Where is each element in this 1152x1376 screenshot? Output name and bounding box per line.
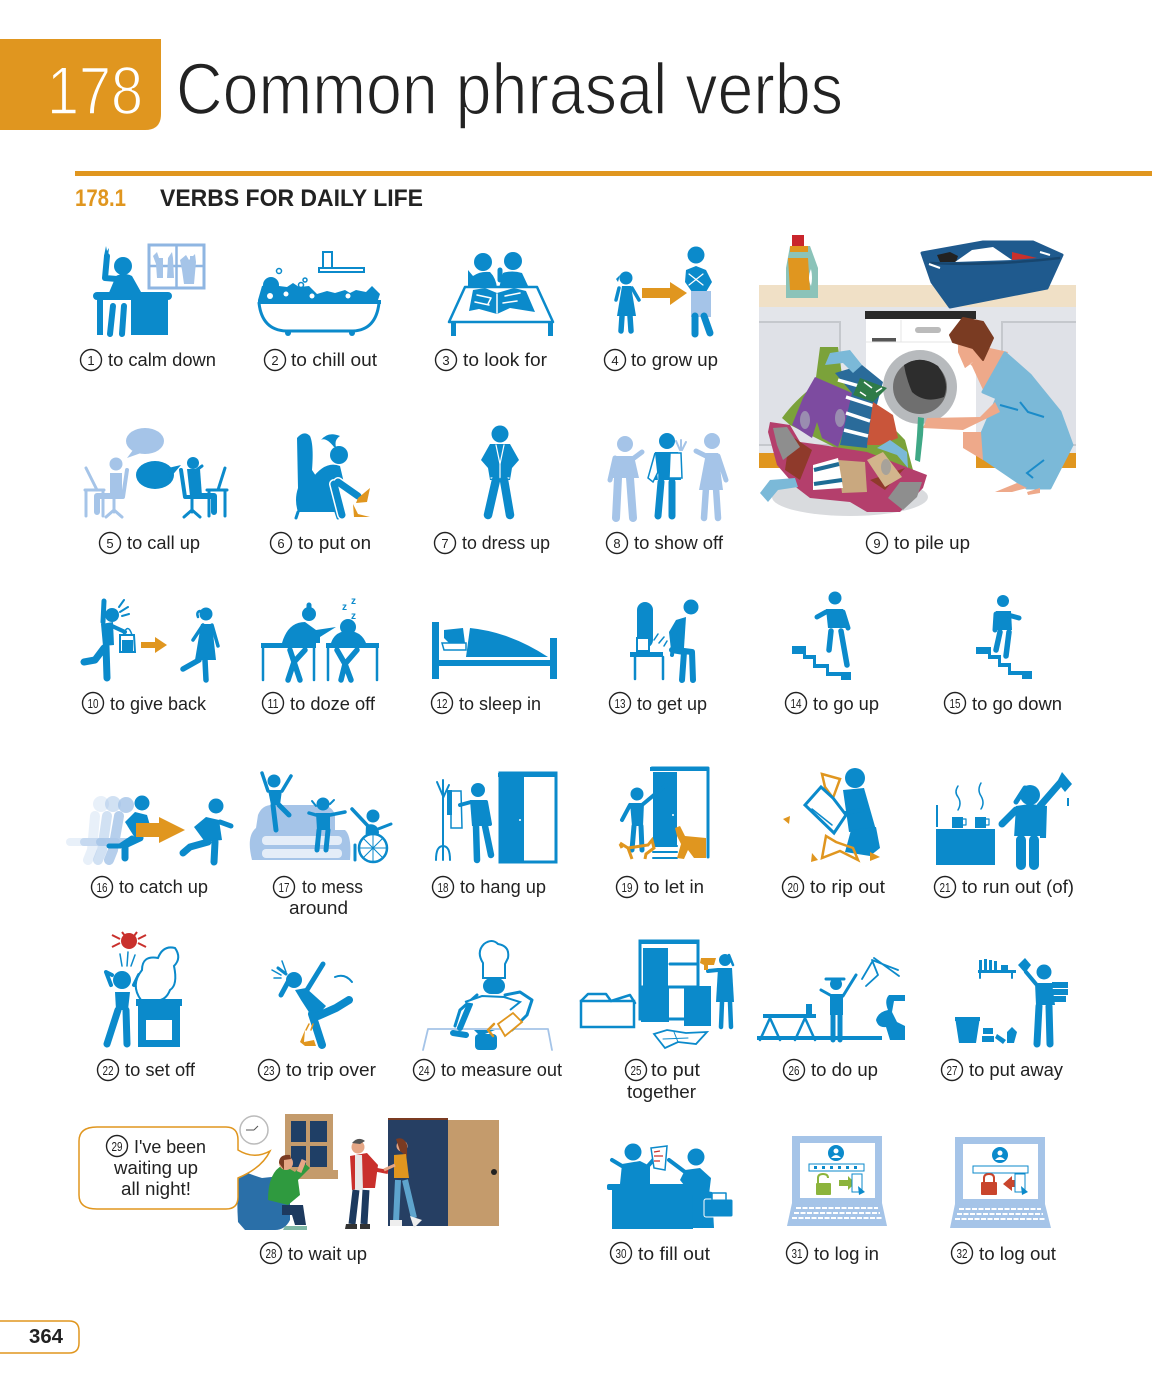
icon: decorating with ladder and table [757,958,905,1040]
icon: bubble bath [258,252,381,336]
label: to rip out [810,877,885,897]
label: to dress up [462,533,550,553]
item 31: to log in [786,1136,887,1264]
label [616,876,704,898]
icon: two people dozing at desks [261,596,379,680]
label [952,1242,1056,1264]
icon: runner catching up with motion trail [66,796,231,862]
label: to sleep in [459,694,541,714]
label: to show off [634,533,724,553]
label: to put [651,1060,700,1080]
label: 2 [271,353,279,368]
label [786,692,879,714]
label: to hang up [460,877,546,897]
label: 30 [616,1246,626,1261]
label [258,1060,376,1080]
icon: person rising from desk chair [630,600,698,680]
icon: person showing off jacket to two others [610,433,726,518]
item 25: to put together [581,941,734,1102]
label [784,1060,878,1080]
label: to log out [979,1244,1056,1264]
icon: two people on phone with speech bubbles [85,428,227,517]
icon: person emptying box by mugs [936,772,1072,865]
icon: person hanging coat by door [436,773,556,863]
item 29: speech bubble: waiting up [113,1158,198,1178]
label: to mess [302,877,363,897]
illustration: woman loading laundry beside pile [759,235,1076,516]
page number [0,1321,79,1353]
page number: 364 [29,1326,64,1348]
label: to get up [637,694,707,714]
icon: children jumping on sofa [250,773,391,862]
label [786,1242,879,1264]
label: to fill out [638,1244,710,1264]
label: 12 [436,696,448,711]
label: 7 [441,536,449,551]
label: 26 [788,1063,800,1078]
label: 8 [613,536,621,551]
section heading: VERBS FOR DAILY LIFE [160,185,423,212]
item 32: to log out [950,1137,1056,1264]
item 27: to put away [942,958,1068,1080]
icon: two people reading map [449,252,553,336]
label: to catch up [119,877,208,897]
title: Common phrasal verbs [176,50,843,130]
label: to put on [298,533,371,553]
item 5: to call up [85,428,227,554]
label: 32 [956,1246,968,1261]
label: 22 [102,1063,114,1078]
item 7: to dress up [434,426,550,554]
label [626,1060,700,1102]
icon: woman in armchair putting on shoes [296,433,370,518]
label [260,1242,367,1264]
label: to log in [814,1244,879,1264]
label [100,532,200,554]
label: 9 [873,536,881,551]
icon: person sleeping in bed [432,622,557,679]
woman [958,352,1007,392]
label [432,692,541,714]
basket [922,242,1062,307]
item 22: to set off [98,932,196,1080]
label: 27 [946,1063,958,1078]
section heading: 178.1 [75,185,126,212]
label: to chill out [291,350,377,370]
pile [772,478,928,516]
item 26: to do up [757,958,905,1080]
label: around [289,898,348,918]
item 30: to fill out [607,1144,733,1264]
icon: laptop locked logout screen [950,1137,1051,1228]
item 13: to get up [610,600,707,714]
icon: two people dozing at desks: z [351,611,356,622]
item 23: to trip over [258,961,376,1080]
item 10: to give back [82,600,218,714]
label: to run out (of) [962,877,1074,897]
label: to pile up [894,533,970,553]
icon: two people dozing at desks: z [342,602,347,613]
item 12: to sleep in [432,622,557,714]
label [610,1242,710,1264]
label: to go down [972,694,1062,714]
label: to go up [813,694,879,714]
label: 18 [438,880,448,895]
label: to doze off [290,694,376,714]
icon: person climbing stairs [792,592,851,680]
label: 11 [268,696,278,711]
label: 17 [278,880,290,895]
label: 5 [106,536,114,551]
label [610,692,707,714]
label [270,532,371,554]
label [782,876,885,898]
label: 13 [614,696,626,711]
label [262,692,376,714]
item 1: to calm down [80,245,216,370]
label: 3 [442,353,450,368]
icon: person tearing paper [783,768,880,862]
chapter number tab [0,39,161,130]
label [264,350,377,370]
item 17: to mess around [250,773,391,918]
item 28: to wait up [237,1114,499,1264]
item 19: to let in [616,767,708,898]
item 9: to pile up [759,235,1076,554]
item 29: speech bubble: I've been [134,1137,206,1157]
label: to wait up [288,1244,367,1264]
item 29: speech bubble: 29 [112,1139,122,1154]
label: to let in [644,877,704,897]
icon: person tripping [272,961,352,1046]
label: to look for [463,350,547,370]
label: 20 [788,880,798,895]
label: to set off [125,1060,196,1080]
item 16: to catch up [66,796,231,898]
label: 16 [96,880,108,895]
item 3: to look for [436,252,553,370]
label: to grow up [631,350,718,370]
label: to call up [127,533,200,553]
icon: two people dozing at desks: z [351,596,356,607]
label: 28 [266,1246,276,1261]
item 8: to show off [606,433,726,554]
icon: tidying shelves [955,958,1068,1044]
item 20: to rip out [782,768,885,898]
label: to trip over [286,1060,376,1080]
label: 15 [950,696,960,711]
sock [915,417,924,462]
icon: chef measuring ingredients [423,941,552,1050]
item 29: speech bubble: all night! [121,1179,191,1199]
label [98,1060,196,1080]
label: 23 [264,1063,274,1078]
icon: filling out form at counter [607,1144,733,1229]
label: 14 [790,696,802,711]
icon: person at desk with window [93,245,204,335]
item 4: to grow up [604,246,718,370]
icon: person descending stairs [976,595,1032,679]
item 24: to measure out [414,941,562,1080]
chapter number tab: 178 [47,53,143,129]
item 18: to hang up [432,773,556,898]
label: together [627,1082,696,1102]
icon: child to adult with arrow [616,246,712,334]
item 14: to go up [786,592,879,714]
illustration: parent waiting up for two people at door [237,1114,499,1230]
icon: laptop unlocked login screen [787,1136,887,1226]
bottle [786,235,818,298]
icon: smoking oven with alarm [106,932,182,1047]
label: 24 [418,1063,430,1078]
icon: person in suit [481,426,519,515]
icon: giving back a bag [84,600,218,680]
label: 4 [611,353,619,368]
label [944,692,1062,714]
item 29: speech bubble [79,1127,270,1209]
label: 6 [277,536,285,551]
item 11: to doze off [261,596,379,714]
label: to put away [969,1060,1063,1080]
icon: person letting dogs in door [620,767,708,859]
label: to give back [110,694,207,714]
label [866,532,970,554]
label: 31 [792,1246,802,1261]
label: to measure out [441,1060,562,1080]
label: to calm down [108,350,216,370]
label: 10 [88,696,98,711]
item 15: to go down [944,595,1062,714]
label [436,350,547,370]
icon: assembling furniture [581,941,734,1048]
label: to do up [811,1060,878,1080]
item 2: to chill out [258,252,381,370]
label: 21 [940,880,950,895]
item 6: to put on [270,433,371,554]
label [274,876,363,918]
label: 25 [630,1063,642,1078]
item 21: to run out (of) [934,772,1074,898]
label: 1 [87,353,95,368]
label: 19 [622,880,632,895]
